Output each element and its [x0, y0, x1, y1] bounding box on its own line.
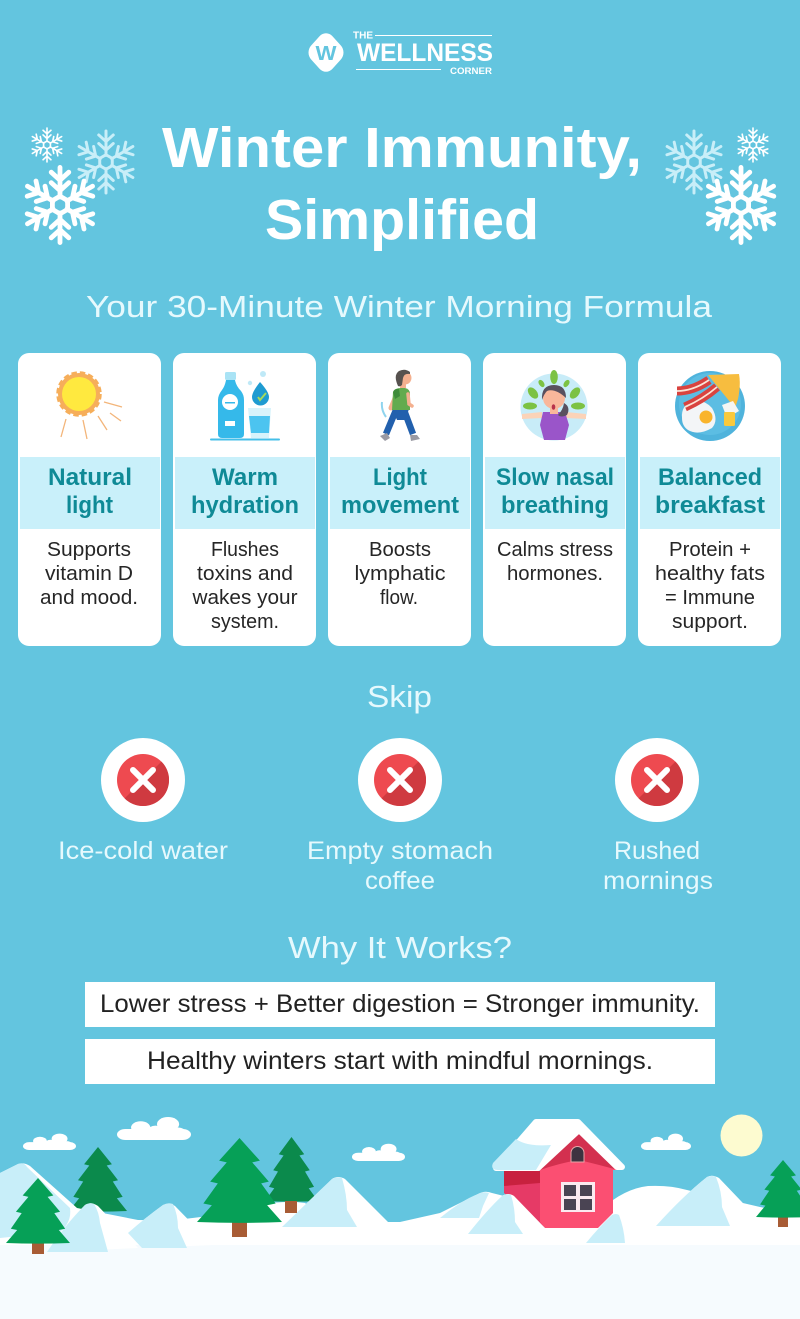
attic window — [571, 1147, 584, 1162]
card heading: hydration — [191, 492, 299, 519]
card text: support. — [672, 611, 748, 633]
front hills — [47, 1176, 762, 1252]
card text: vitamin D — [45, 563, 133, 585]
callout: formula: Lower stress + Better digestion = Stronger immunity. — [100, 990, 700, 1018]
card text: healthy fats — [655, 563, 765, 585]
house — [492, 1122, 622, 1228]
logo wordmark: THE — [353, 30, 373, 42]
icon: sun — [58, 372, 122, 439]
label: Ice-cold water — [58, 837, 228, 865]
icon: breakfast plate — [675, 371, 745, 441]
card text: flow. — [380, 587, 418, 609]
card band — [20, 457, 160, 529]
clouds — [23, 1117, 691, 1161]
card text: Calms stress — [497, 539, 613, 561]
skip: rushed mornings — [603, 738, 713, 895]
heading: skip: Skip — [367, 679, 432, 714]
card heading: breathing — [501, 492, 609, 519]
card heading: Warm — [212, 464, 278, 491]
panel: light movement — [328, 353, 471, 646]
card text: lymphatic — [354, 563, 446, 585]
label: Empty stomach — [307, 837, 493, 865]
card text: and mood. — [40, 587, 138, 609]
card band — [485, 457, 625, 529]
card band — [175, 457, 315, 529]
snowflakes left — [23, 128, 136, 243]
card heading: light — [66, 492, 113, 519]
skip: empty stomach coffee — [307, 738, 493, 895]
label: Rushed — [614, 837, 700, 865]
card heading: Natural — [48, 464, 132, 491]
moon — [720, 1114, 762, 1156]
callout: closing line: Healthy winters start with mindful mornings. — [147, 1047, 653, 1075]
panel: warm hydration — [173, 353, 316, 646]
callout: formula — [85, 982, 715, 1027]
card band — [640, 457, 780, 529]
logo wordmark — [353, 30, 493, 76]
back trees — [69, 1137, 318, 1212]
skip: ice-cold water — [58, 738, 228, 865]
card text: wakes your — [191, 587, 298, 609]
card text: Flushes — [211, 539, 279, 561]
card band — [330, 457, 470, 529]
heading: why it works: Why It Works? — [288, 930, 512, 965]
snow ground and far hills — [0, 1163, 800, 1319]
label — [603, 837, 713, 895]
logo badge — [305, 29, 347, 76]
card heading: Balanced — [658, 464, 762, 491]
icon: red cross — [615, 738, 699, 822]
card heading — [341, 464, 459, 519]
card text — [40, 539, 138, 609]
icon: water bottle and glass — [210, 371, 280, 440]
icon: walking person — [380, 370, 420, 441]
front trees — [6, 1138, 800, 1254]
label: coffee — [365, 867, 435, 895]
logo wordmark: CORNER — [450, 66, 493, 76]
title — [162, 116, 642, 252]
card heading: movement — [341, 492, 459, 519]
logo W: W — [316, 43, 337, 65]
card text — [191, 539, 298, 633]
callout: closing line — [85, 1039, 715, 1084]
logo — [305, 29, 493, 76]
card heading: Light — [373, 464, 427, 491]
card text: = Immune — [665, 587, 755, 609]
panel: slow nasal breathing — [483, 353, 626, 646]
card heading — [496, 464, 614, 519]
card heading — [655, 464, 765, 519]
card text: Protein + — [669, 539, 751, 561]
logo wordmark: WELLNESS — [357, 39, 493, 67]
snowflakes right — [664, 128, 778, 243]
card heading: Slow nasal — [496, 464, 614, 491]
card heading: breakfast — [655, 492, 765, 519]
card text: toxins and — [197, 563, 293, 585]
card text: Supports — [47, 539, 131, 561]
card text: hormones. — [507, 563, 603, 585]
title: Winter Immunity, — [162, 116, 642, 180]
window — [561, 1182, 595, 1212]
icon: breathing woman — [520, 370, 588, 440]
label: mornings — [603, 867, 713, 895]
icon: red cross — [101, 738, 185, 822]
panel: balanced breakfast — [638, 353, 781, 646]
winter landscape — [0, 1114, 800, 1319]
subtitle: Your 30-Minute Winter Morning Formula — [86, 289, 713, 324]
card heading — [191, 464, 299, 519]
card text: Boosts — [369, 539, 431, 561]
card text — [354, 539, 446, 609]
panel: natural light — [18, 353, 161, 646]
card text — [497, 539, 613, 585]
card text — [655, 539, 765, 633]
roof snow — [496, 1122, 622, 1168]
label — [307, 837, 493, 895]
card heading — [48, 464, 132, 519]
icon: red cross — [358, 738, 442, 822]
title: Simplified — [265, 188, 539, 252]
card text: system. — [211, 611, 279, 633]
